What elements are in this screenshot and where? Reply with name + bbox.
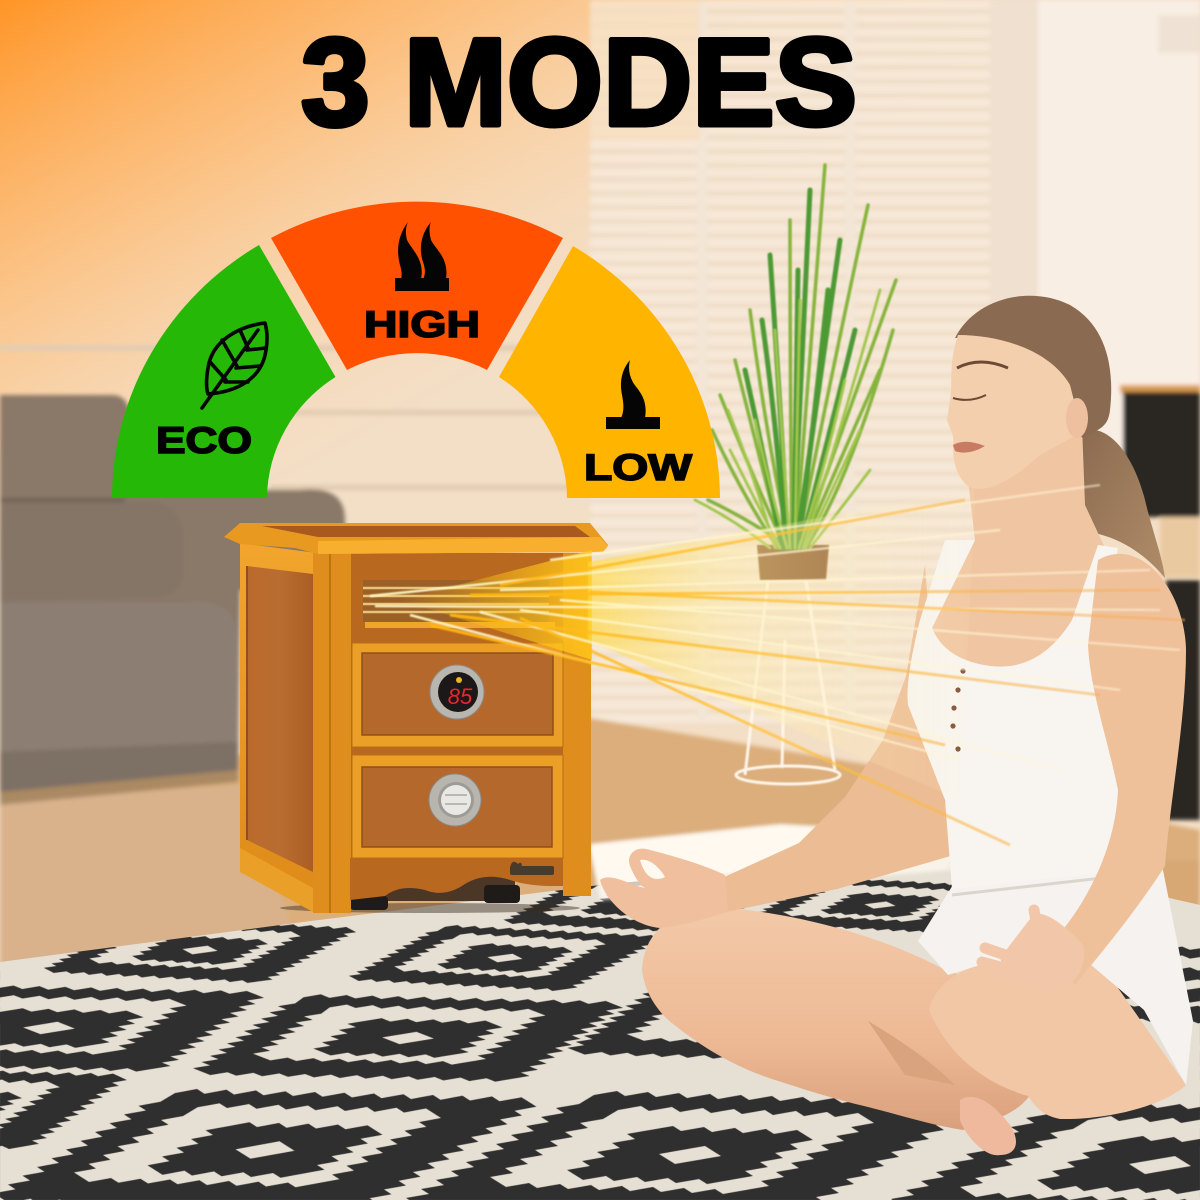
buttons: [950, 668, 966, 752]
brow and eye: [953, 362, 1008, 400]
tank top: [908, 540, 1155, 889]
title: 3 MODES: [301, 14, 857, 152]
waist shadow: [952, 872, 1155, 895]
wedge on heater: [400, 550, 592, 660]
face: [947, 335, 1082, 489]
ponytail: [1078, 430, 1165, 578]
left arm: [722, 565, 954, 912]
segment: eco: [112, 245, 336, 498]
icon: single flame: [606, 360, 660, 429]
front body: [313, 553, 591, 913]
sunlight on rug: [590, 825, 955, 900]
icon: double flame: [395, 222, 449, 291]
wall glow: [0, 0, 1000, 560]
heat grille: [363, 580, 555, 628]
lower drawer: [352, 755, 563, 858]
upper drawer: [352, 643, 563, 747]
temperature display: 85: [448, 684, 473, 709]
label: eco: ECO: [156, 420, 252, 461]
heat beams: [370, 485, 1185, 845]
mode gauge: [112, 202, 720, 498]
beam streaks: [370, 485, 1185, 845]
icon: leaf: [202, 323, 267, 408]
plant on stand: [695, 165, 896, 784]
patterned rug: [0, 850, 1200, 1200]
neck and chest: [932, 425, 1105, 667]
control knob: [429, 774, 481, 826]
top: [224, 523, 608, 554]
hair: [955, 296, 1111, 438]
wedge to woman: [588, 488, 975, 800]
segment: low: [499, 246, 720, 498]
temperature display: [430, 665, 484, 719]
scalloped base: [350, 858, 563, 900]
right arm: [1045, 554, 1186, 985]
shorts: [918, 855, 1193, 1085]
foot: [960, 1097, 1016, 1155]
heater: [224, 523, 608, 913]
floor shadow and wheels: [280, 875, 580, 913]
crossed legs: [642, 908, 1186, 1155]
label: high: HIGH: [364, 304, 480, 345]
segment: high: [271, 202, 563, 370]
right hand: [982, 910, 1084, 992]
lips: [953, 442, 985, 453]
left hand: [600, 849, 728, 928]
brand badge: [510, 862, 554, 875]
label: low: LOW: [584, 447, 692, 488]
woman: [600, 296, 1193, 1155]
side panel: [240, 543, 317, 913]
ear: [1066, 398, 1088, 438]
